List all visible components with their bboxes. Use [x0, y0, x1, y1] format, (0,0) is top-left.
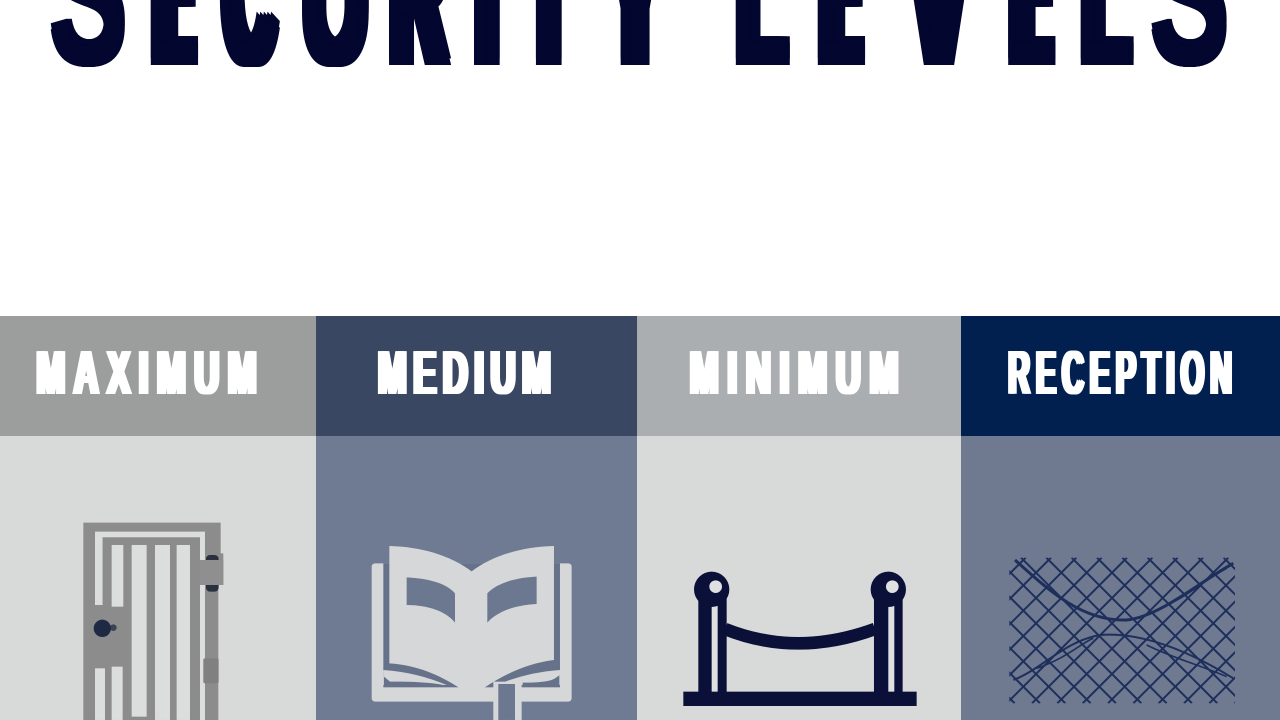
icon: torn net	[1009, 558, 1235, 704]
panel: medium	[316, 316, 637, 720]
icon: cell door	[83, 523, 223, 720]
label: maximum: MAXIMUM	[34, 337, 254, 408]
header band: minimum	[637, 316, 961, 436]
header band: medium	[316, 316, 637, 436]
icon: open book	[372, 546, 572, 720]
panel: maximum	[0, 316, 316, 720]
column body: maximum	[0, 436, 316, 720]
label: medium: MEDIUM	[376, 337, 548, 408]
header band: reception	[961, 316, 1280, 436]
column body: minimum	[637, 436, 961, 720]
title	[47, 0, 1228, 108]
panel: minimum	[637, 316, 961, 720]
label: minimum: MINIMUM	[688, 337, 896, 408]
label: reception: RECEPTION	[1006, 339, 1230, 408]
column body: reception	[961, 436, 1280, 720]
header band: maximum	[0, 316, 316, 436]
column body: medium	[316, 436, 637, 720]
panel: reception	[961, 316, 1280, 720]
icon: rope barrier	[683, 572, 917, 706]
